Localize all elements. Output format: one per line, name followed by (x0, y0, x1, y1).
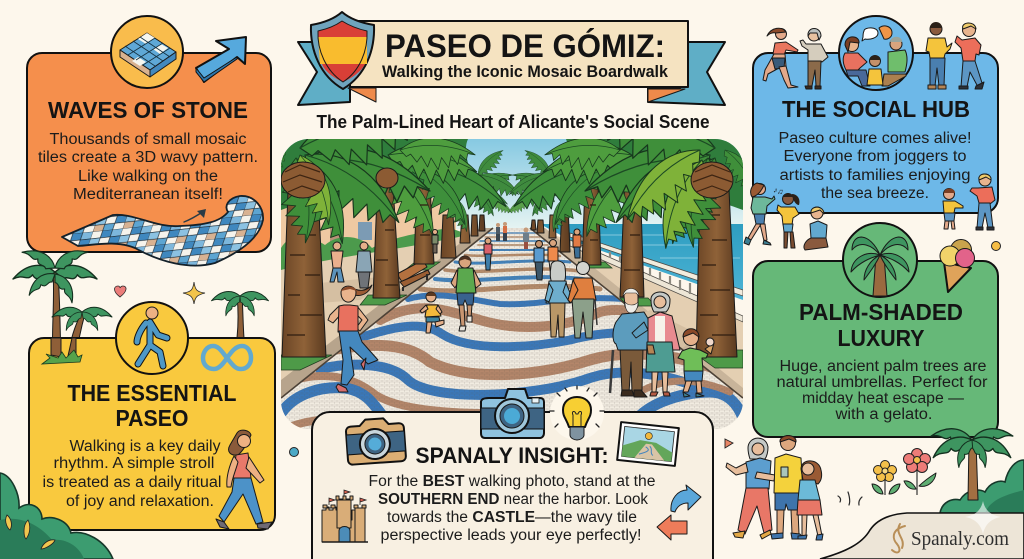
text: palm-shaded luxury body: natural umbrellas. Perfect for (776, 374, 988, 391)
heading: palm-shaded luxury (799, 299, 963, 351)
heading: the essential paseo (68, 380, 236, 431)
runner man in green (451, 256, 481, 331)
icon: direction arrows (657, 485, 701, 540)
text: palm-shaded luxury body (776, 358, 988, 423)
icon: mosaic tile square (111, 16, 183, 88)
icon: people chatting circle (839, 16, 913, 90)
people below the panel (744, 174, 995, 250)
icon: infinity loop (203, 346, 251, 369)
text: waves of stone body: tiles create a 3D wavy pattern. (38, 149, 258, 166)
walking couple from behind (545, 261, 597, 338)
balustrade railing (570, 233, 743, 322)
sea (540, 224, 743, 300)
icon: sparkle (183, 282, 205, 304)
decorative yellow dot (992, 242, 1000, 250)
heading: main title: PASEO DE GÓMIZ: (385, 28, 665, 64)
text: essential paseo body: rhythm. A simple stroll (54, 455, 214, 472)
heading: palm-shaded luxury: LUXURY (838, 325, 924, 351)
text: essential paseo body (42, 438, 221, 510)
tree bases over panel (51, 338, 76, 357)
illustration: family walking (726, 436, 823, 540)
heading: Spanaly insight: SPANALY INSIGHT: (416, 443, 608, 468)
distant palm fronds (450, 150, 570, 232)
panel: essential paseo (13, 243, 275, 530)
palm trees above the panel (13, 243, 269, 359)
text: social hub body: Paseo culture comes alive! (778, 130, 972, 147)
walkway curbs (281, 228, 743, 398)
text: Spanaly insight body: SOUTHERN END near the harbor. Look (378, 491, 648, 508)
text: waves of stone body: Thousands of small mosaic (50, 131, 247, 148)
text: essential paseo body: Walking is a key daily (70, 438, 221, 455)
running child in yellow (420, 292, 444, 333)
sky (281, 139, 743, 229)
text: essential paseo body: is treated as a daily ritual (42, 474, 221, 491)
text: social hub body (778, 130, 972, 202)
bush: bottom right (940, 460, 1024, 513)
icon: palm in circle (843, 223, 917, 297)
heading: the essential paseo: THE ESSENTIAL (68, 380, 236, 406)
illustration: flowers (872, 448, 936, 495)
tagline: The Palm-Lined Heart of Alicante's Social Scene (316, 112, 710, 132)
text: Spanaly insight body: towards the CASTLE—the wavy tile (387, 509, 637, 526)
text: brand name: Spanaly.com (911, 528, 1009, 550)
icon: top camera (481, 389, 544, 438)
panel: Spanaly insight (312, 386, 713, 559)
music notes: ♪♫ (772, 185, 784, 197)
central illustration: palm-lined mosaic boardwalk (281, 139, 743, 429)
text: social hub body: artists to families enjoying (780, 167, 970, 184)
big palm fronds (281, 139, 743, 249)
icon: castle (322, 490, 368, 542)
buildings on the left (281, 198, 460, 270)
decorative dot (290, 448, 298, 456)
text: Spanaly insight body: For the BEST walking photo, stand at the (368, 473, 656, 490)
pavement sides (281, 234, 743, 388)
panel: palm-shaded luxury (753, 223, 998, 437)
distant walkers (330, 222, 581, 288)
text: social hub body: Everyone from joggers to (784, 148, 966, 165)
walkway mosaic waves (281, 228, 745, 432)
big palm trunks (282, 190, 737, 357)
text: essential paseo body: of joy and relaxation. (66, 493, 214, 510)
text: Spanaly insight body: perspective leads your eye perfectly! (380, 527, 642, 544)
grass at tree bases (281, 262, 743, 370)
text: Spanaly insight body (368, 473, 656, 544)
illustration: mosaic wave (62, 196, 263, 266)
mid palm trunks (372, 188, 644, 298)
panel: the social hub (744, 16, 998, 250)
grass tuft (42, 350, 82, 364)
heading: subtitle: Walking the Iconic Mosaic Boardwalk (382, 62, 669, 81)
icon: tan camera (345, 417, 406, 465)
jogger woman (328, 285, 378, 392)
mid palm fronds (388, 139, 632, 237)
icon: heart (114, 286, 126, 297)
illustration: motion ticks (838, 492, 862, 505)
icon: light bulb (550, 386, 604, 440)
banner title (298, 12, 725, 105)
banner plate (350, 21, 688, 87)
heading: the social hub: THE SOCIAL HUB (782, 96, 970, 122)
brand footer (820, 501, 1024, 559)
bulb halo (550, 386, 604, 440)
decorative triangle (725, 439, 733, 448)
small arrow pointing at wave (184, 209, 206, 222)
heading: palm-shaded luxury: PALM-SHADED (799, 299, 963, 325)
elderly couple (610, 288, 680, 397)
illustration: palm tree right (930, 423, 1014, 500)
panel: waves of stone (27, 16, 271, 266)
text: waves of stone body (38, 131, 258, 203)
heading: waves of stone: WAVES OF STONE (48, 97, 248, 123)
icon: blue arrow (196, 37, 246, 82)
text: waves of stone body: Like walking on the (78, 168, 218, 185)
text: palm-shaded luxury body: with a gelato. (834, 406, 932, 423)
bush: bottom left (0, 473, 113, 559)
text: palm-shaded luxury body: midday heat escape — (802, 390, 964, 407)
people above the panel (763, 22, 984, 89)
ribbon tails (298, 42, 725, 105)
canopy shade (281, 139, 743, 210)
text: waves of stone body: Mediterranean itself! (73, 186, 223, 203)
icon: watermark sparkle (965, 501, 1001, 534)
text: palm-shaded luxury body: Huge, ancient palm trees are (780, 358, 986, 375)
icon: Spanish flag shield (311, 12, 374, 89)
icon: walking figure (116, 302, 188, 374)
illustration: walking woman (216, 430, 272, 529)
bench (398, 264, 430, 291)
palm crowns (281, 162, 733, 198)
boy with ice cream (678, 329, 714, 397)
icon: Spanaly logo (892, 524, 905, 552)
icon: photo print (617, 422, 679, 466)
icon: ice cream (940, 240, 974, 292)
heading: the essential paseo: PASEO (116, 405, 188, 431)
distant palm trunks (440, 214, 570, 258)
text: social hub body: the sea breeze. (821, 185, 929, 202)
